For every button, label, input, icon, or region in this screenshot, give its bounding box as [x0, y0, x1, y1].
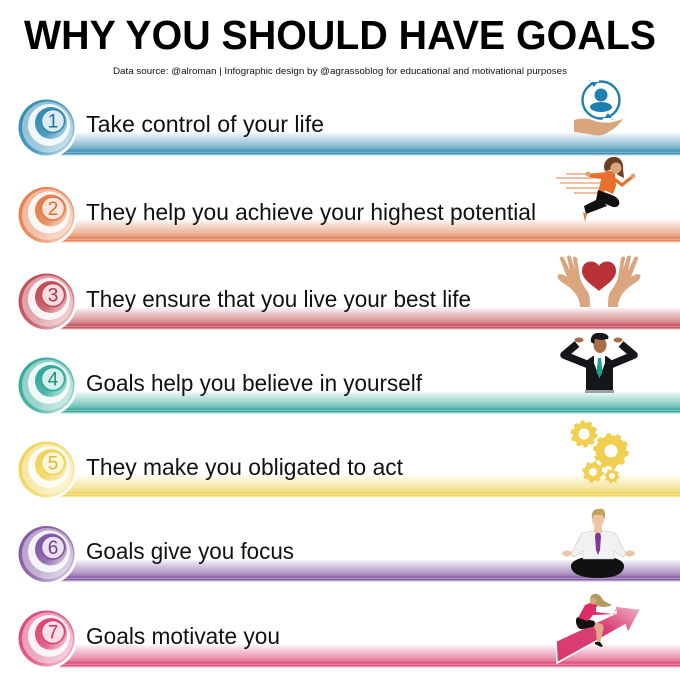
label 4: Goals help you believe in yourself [86, 370, 422, 396]
badge 3: 3 [48, 286, 58, 306]
icon: gears [572, 422, 627, 482]
icon: woman riding arrow [556, 594, 641, 663]
label 7: Goals motivate you [86, 623, 280, 649]
badge 6: 6 [48, 538, 58, 559]
bar 2 [60, 220, 680, 243]
row 3: best life [17, 256, 680, 332]
badge 4: 4 [48, 370, 59, 390]
badge 2: 2 [48, 199, 58, 220]
icon: meditating man [562, 509, 635, 578]
badge 4 [17, 356, 77, 416]
badge 7 [17, 609, 77, 669]
badge 1: 1 [48, 112, 58, 132]
badge 7: 7 [48, 622, 58, 644]
bar 3 [60, 308, 680, 330]
bar 6 [60, 560, 680, 582]
icon: businessman flexing [564, 333, 634, 393]
row 7: motivate [17, 594, 680, 669]
bar 5 [60, 475, 680, 498]
badge 5: 5 [48, 454, 58, 474]
badge 3 [17, 272, 77, 332]
label 6: Goals give you focus [86, 538, 294, 564]
bar 7 [60, 645, 680, 668]
badge 2 [17, 186, 77, 246]
icon: hands holding heart [557, 256, 641, 307]
badge 1 [17, 98, 77, 158]
badge 5 [17, 440, 77, 500]
row 2: highest potential [17, 157, 680, 246]
label 1: Take control of your life [86, 111, 324, 137]
label 2: They help you achieve your highest potential [86, 199, 536, 225]
row 5: obligated to act [17, 422, 680, 500]
label 3: They ensure that you live your best life [86, 286, 471, 312]
icon: person in cycle over hand [574, 79, 623, 135]
row 4: believe in yourself [17, 333, 680, 416]
icon: running woman [556, 157, 636, 222]
data source line: Data source: @alroman | Infographic design by @agrassoblog for educational and motivational purposes [113, 66, 568, 76]
bar 4 [60, 392, 680, 414]
badge 6 [17, 524, 77, 584]
label 5: They make you obligated to act [86, 454, 404, 480]
row 1: take control [17, 79, 680, 158]
row 6: focus [17, 509, 680, 584]
title: WHY YOU SHOULD HAVE GOALS [24, 12, 656, 58]
bar 1 [60, 133, 680, 156]
